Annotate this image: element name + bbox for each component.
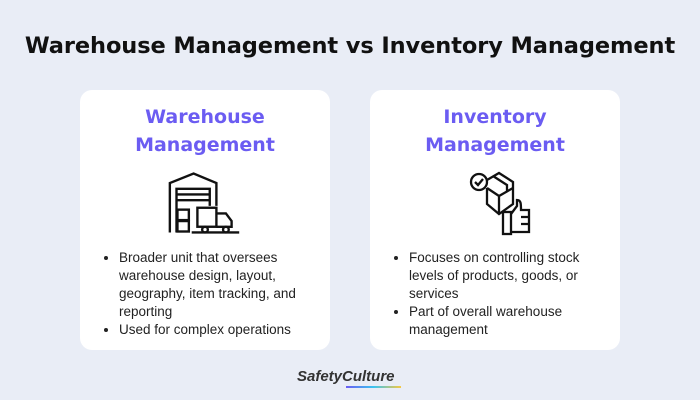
- heading: inventory: [425, 106, 565, 156]
- panel: warehouse: [80, 90, 330, 350]
- bullets: warehouse: Used for complex operations: [119, 322, 291, 337]
- heading: warehouse: [135, 106, 275, 156]
- heading: warehouse: Management: [135, 134, 275, 156]
- icon: warehouse: [168, 172, 240, 234]
- heading: inventory: Management: [425, 134, 565, 156]
- icon: box thumbs up: [470, 172, 530, 236]
- bullets: warehouse: Broader unit that oversees warehouse design, layout, geography, item tracking, and reporting: [119, 250, 296, 319]
- panel: inventory: [370, 90, 620, 350]
- bullets: inventory: [394, 250, 580, 337]
- title: Warehouse Management vs Inventory Management: [25, 33, 675, 59]
- bullets: inventory: Focuses on controlling stock levels of products, goods, or services: [409, 250, 579, 301]
- bullets: inventory: Part of overall warehouse management: [409, 304, 562, 337]
- heading: warehouse: Warehouse: [145, 106, 265, 128]
- logo: SafetyCulture: [297, 368, 395, 385]
- heading: inventory: Inventory: [443, 106, 547, 128]
